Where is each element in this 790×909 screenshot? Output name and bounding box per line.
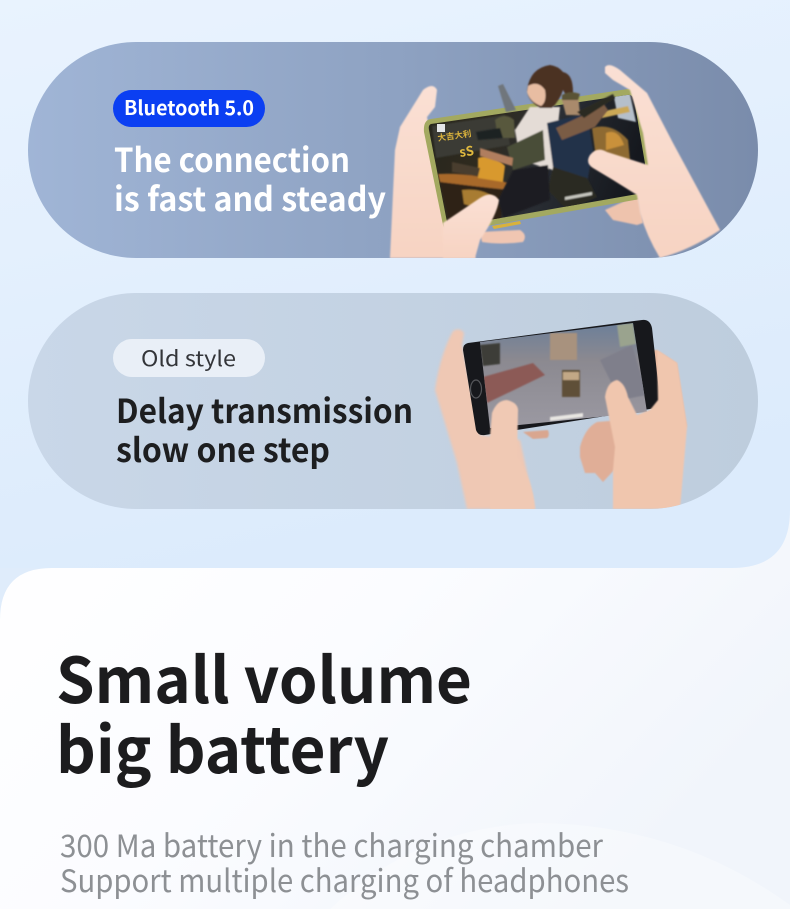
heading: The connection is fast and steady: is fast and steady — [114, 173, 386, 221]
panel: Bluetooth 5.0 — [28, 42, 758, 258]
game artwork on screen: sS — [458, 140, 475, 161]
phone screen — [429, 95, 649, 226]
game scene — [480, 323, 647, 421]
right hand back part — [654, 349, 688, 426]
left hand back fingers — [480, 230, 525, 244]
heading: Delay transmission slow one step: Delay transmission — [116, 385, 413, 433]
left thumb — [443, 194, 499, 258]
bottom panel background — [0, 500, 790, 909]
home button — [470, 380, 482, 398]
heading: Delay transmission slow one step — [116, 385, 413, 472]
game artwork on screen — [432, 92, 636, 228]
left thumb — [490, 400, 535, 509]
game characters — [476, 65, 615, 218]
heading: The connection is fast and steady — [114, 134, 386, 221]
heading: Small volume big battery: Small volume — [56, 631, 472, 722]
illustration: hands holding green phone with game — [390, 65, 720, 258]
badge: Old style — [113, 339, 265, 377]
black phone — [463, 320, 660, 435]
badge: Bluetooth 5.0 — [113, 90, 265, 127]
heading: The connection is fast and steady: The connection — [114, 134, 350, 182]
heading: Small volume big battery — [56, 631, 472, 792]
left hand — [435, 329, 535, 509]
phone yellow side button — [492, 221, 521, 229]
panel: Old style — [28, 293, 758, 509]
text block: battery description: Support multiple charging of headphones — [60, 856, 629, 901]
badge: Old style: Old style — [141, 343, 236, 373]
right hand back fingers — [605, 195, 643, 225]
on-screen game text: 大吉大利 — [437, 127, 472, 144]
text block: battery description: 300 Ma battery in the charging chamber — [60, 821, 604, 866]
text block: battery description — [60, 821, 629, 901]
green phone — [424, 89, 653, 232]
illustration: hands holding black phone — [435, 320, 687, 509]
right hand — [588, 65, 720, 258]
badge: Bluetooth 5.0: Bluetooth 5.0 — [124, 92, 254, 121]
right hand — [605, 350, 687, 509]
phone screen — [480, 323, 647, 428]
heading: Delay transmission slow one step: slow one step — [116, 424, 330, 472]
left hand back finger — [523, 430, 549, 439]
top panel background — [0, 0, 790, 568]
heading: Small volume big battery: big battery — [56, 701, 389, 792]
left hand — [390, 86, 476, 258]
right hand back fingers — [580, 420, 620, 482]
